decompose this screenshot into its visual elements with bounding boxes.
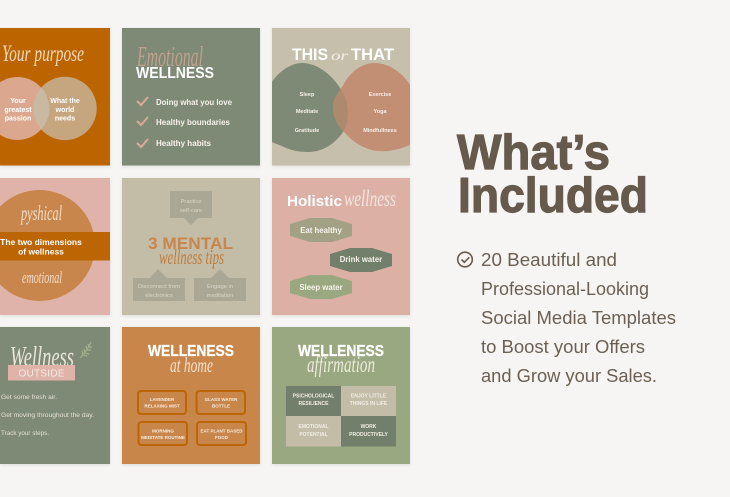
- venn diagram: passion: [5, 116, 31, 122]
- heading: THIS or THAT: THIS: [292, 46, 328, 64]
- grid: ENJOY LITTLE: [351, 394, 387, 400]
- box: morning routine: MORNING: [152, 428, 174, 434]
- tips text: Track your steps.: [1, 430, 49, 437]
- callout: disconnect: Disconnect from: [138, 284, 180, 290]
- grid: PRODUCTIVELY: [349, 432, 389, 438]
- box: lavender: [138, 391, 186, 414]
- options: Meditate: [296, 109, 318, 115]
- grid: THINGS IN LIFE: [350, 401, 388, 407]
- title: What's Included: What’s: [457, 126, 610, 180]
- heading: WELLNESS: WELLNESS: [136, 65, 214, 82]
- venn diagram: [0, 77, 97, 140]
- box: glass water bottle: GLASS WATER: [205, 397, 238, 402]
- blob overlap: [333, 89, 348, 131]
- description text: Professional-Looking: [481, 279, 649, 299]
- tag: sleep water: Sleep water: [299, 283, 343, 292]
- venn diagram: What the: [50, 98, 80, 105]
- circle: [0, 190, 95, 301]
- panel: mental wellness tips: [122, 178, 260, 315]
- blob: this: [272, 63, 348, 152]
- blob: that: [333, 63, 410, 151]
- panel: your purpose: [0, 28, 110, 166]
- label: OUTSIDE: OUTSIDE: [18, 368, 65, 380]
- callout: practice self-care: self-care: [180, 208, 202, 214]
- box: morning routine: MEDITATE ROUTINE: [141, 435, 185, 440]
- panel: two dimensions: [0, 178, 110, 315]
- description text: to Boost your Offers: [481, 337, 645, 357]
- heading: THIS or THAT: [292, 46, 394, 64]
- panel: welleness affirmation: [272, 327, 410, 464]
- script: pyshical: pyshical: [20, 201, 62, 225]
- callout: disconnect: electronics: [145, 293, 173, 299]
- grid: POTENTIAL: [299, 432, 328, 438]
- tag: drink water: Drink water: [340, 255, 382, 264]
- grid: [286, 386, 396, 446]
- heading: 3 MENTAL: 3 MENTAL: [148, 234, 233, 253]
- checklist: Healthy boundaries: [156, 118, 231, 127]
- grid: PSICHOLOGICAL: [293, 394, 334, 400]
- band: of wellness: [18, 246, 64, 256]
- checklist: [137, 97, 233, 148]
- options: [295, 92, 397, 134]
- heading: Holistic: Holistic: [287, 193, 342, 210]
- title: What's Included: [457, 126, 648, 223]
- icon: check circle: [458, 252, 472, 267]
- options: Yoga: [373, 109, 387, 115]
- box: glass water bottle: BOTTLE: [212, 404, 230, 408]
- description text: Social Media Templates: [481, 308, 676, 328]
- tips text: Get some fresh air.: [1, 394, 57, 401]
- heading: WELLENESS: [298, 343, 384, 360]
- box: plant based food: [197, 422, 246, 445]
- description text: and Grow your Sales.: [481, 366, 657, 386]
- grid: EMOTIONAL: [298, 424, 328, 430]
- options: Mindfullness: [363, 128, 397, 134]
- options: Sleep: [300, 92, 315, 98]
- tag: eat healthy: Eat healthy: [300, 226, 342, 235]
- callout: practice self-care: Practice: [181, 199, 201, 205]
- grid: WORK: [361, 424, 377, 430]
- venn diagram: greatest: [4, 107, 32, 114]
- script: wellness tips: wellness tips: [159, 245, 224, 269]
- description text: 20 Beautiful and: [481, 250, 617, 270]
- band: [0, 232, 110, 260]
- venn diagram: needs: [55, 116, 75, 122]
- tips text: Get moving throughout the day.: [1, 412, 94, 419]
- heading: WELLENESS: [148, 343, 234, 360]
- callout: practice self-care: [170, 191, 212, 225]
- script: Wellness: Wellness: [10, 341, 74, 373]
- venn diagram: Your: [10, 98, 26, 105]
- options: Gratitude: [295, 128, 319, 134]
- options: Exercise: [369, 92, 391, 98]
- script: at home: at home: [170, 353, 213, 377]
- panel: this or that: [272, 28, 410, 166]
- callout: meditation: meditation: [207, 293, 233, 299]
- tips text: [1, 394, 94, 437]
- callout: meditation: Engage in: [207, 284, 233, 290]
- panel: holistic wellness: [272, 178, 410, 315]
- callout: disconnect: [133, 269, 185, 301]
- script: emotional: emotional: [22, 268, 62, 287]
- box: plant based food: EAT PLANT BASED: [201, 428, 243, 434]
- script heading: Emotional: Emotional: [136, 42, 203, 73]
- description text: [481, 250, 676, 386]
- band: The two dimensions: [0, 237, 82, 247]
- callout: meditation: [194, 269, 246, 301]
- heading: THIS or THAT: or: [331, 49, 349, 64]
- box: lavender: RELAXING MIST: [144, 404, 180, 408]
- script heading: Your purpose: Your purpose: [2, 41, 84, 66]
- script: wellness: wellness: [344, 186, 396, 211]
- grid: RESILIENCE: [298, 401, 329, 407]
- venn diagram: world: [55, 107, 74, 114]
- box: plant based food: FOOD: [215, 435, 229, 440]
- panel: welleness at home: [122, 327, 260, 464]
- heading: THIS or THAT: THAT: [351, 46, 394, 64]
- box: lavender: LAVENDER: [150, 397, 175, 402]
- title: What's Included: Included: [458, 169, 648, 223]
- panel: wellness outside: [0, 327, 110, 464]
- panel: emotional wellness: [122, 28, 260, 166]
- icon: leaf sprig: [80, 342, 92, 358]
- checklist: Healthy habits: [156, 139, 212, 148]
- box: morning routine: [138, 422, 187, 445]
- box: glass water bottle: [196, 391, 245, 414]
- script: affirmation: affirmation: [307, 352, 375, 377]
- checklist: Doing what you love: [156, 98, 233, 107]
